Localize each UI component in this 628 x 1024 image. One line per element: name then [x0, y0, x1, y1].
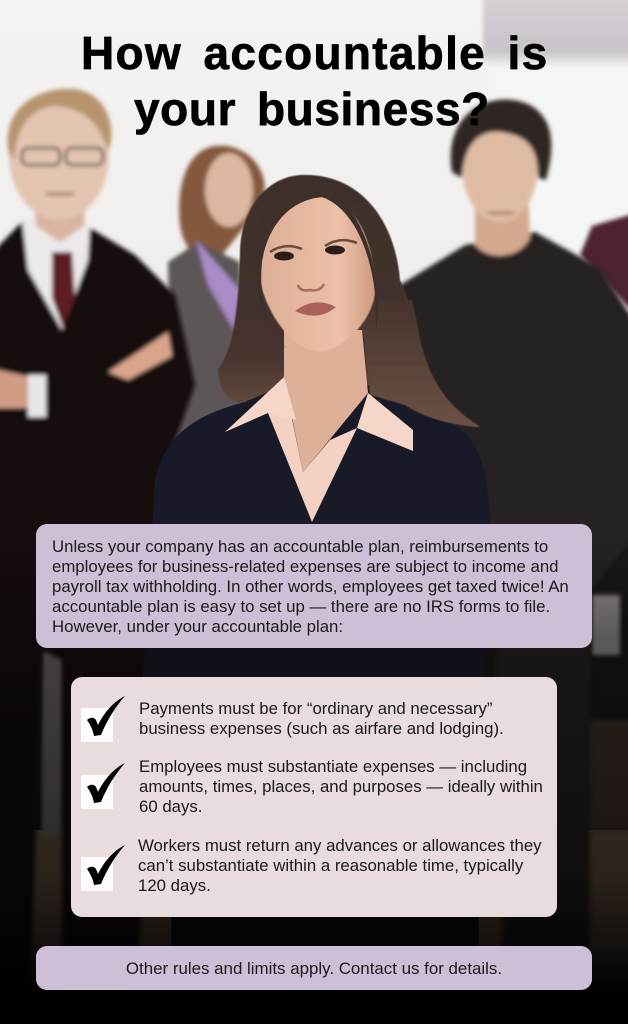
eyes — [274, 252, 294, 260]
icon: check box 2 — [81, 763, 125, 809]
text 1: business expenses (such as airfare and lodging). — [139, 719, 504, 738]
panel: footer note: Other rules and limits apply. Contact us for details. — [126, 959, 502, 978]
panel: introduction — [36, 524, 592, 648]
lips — [295, 302, 336, 316]
jacket — [142, 385, 490, 690]
text 3: 120 days. — [138, 876, 211, 895]
title: your business? — [134, 83, 490, 135]
intro text: payroll tax withholding. In other words, employees get taxed twice! An — [52, 577, 569, 596]
collar left — [225, 377, 296, 432]
text 2 — [139, 757, 543, 816]
text 2: Employees must substantiate expenses — including — [139, 757, 527, 776]
title: How accountable is — [81, 27, 548, 79]
checklist item 2 — [81, 757, 543, 816]
checklist item 1 — [81, 696, 504, 742]
main woman — [142, 175, 490, 1024]
text 3: Workers must return any advances or allowances they — [138, 836, 542, 855]
man on left — [0, 89, 195, 1024]
bottom fade — [0, 540, 628, 1024]
man on right — [400, 99, 628, 1024]
hair front — [256, 176, 378, 350]
intro text: Unless your company has an accountable plan, reimbursements to — [52, 537, 548, 556]
panel: checklist — [71, 677, 557, 917]
skirt and legs — [170, 680, 480, 1024]
woman in back — [168, 146, 265, 450]
eyebrows — [270, 240, 357, 252]
title — [81, 27, 548, 135]
face — [258, 197, 375, 352]
intro text: However, under your accountable plan: — [52, 617, 343, 636]
text 2: 60 days. — [139, 797, 202, 816]
hair over right shoulder — [360, 300, 480, 427]
blouse — [268, 380, 357, 522]
neck and chest — [284, 330, 368, 472]
intro text: accountable plan is easy to set up — there are no IRS forms to file. — [52, 597, 550, 616]
text 3 — [138, 836, 542, 895]
icon: check box 1 — [81, 696, 125, 742]
hair back — [218, 175, 480, 427]
icon: check box 3 — [81, 845, 125, 891]
text 2: amounts, times, places, and purposes — ideally within — [139, 777, 543, 796]
far right person — [580, 212, 628, 320]
wall — [0, 0, 628, 540]
text 3: can’t substantiate within a reasonable time, typically — [138, 856, 523, 875]
panel: footer note — [36, 946, 592, 990]
checklist item 3 — [81, 836, 542, 895]
nose — [298, 284, 324, 290]
text 1: Payments must be for “ordinary and necessary” — [139, 699, 492, 718]
intro text: employees for business-related expenses are subject to income and — [52, 557, 559, 576]
text 1 — [139, 699, 504, 738]
collar right — [357, 393, 413, 451]
intro text — [52, 537, 569, 636]
